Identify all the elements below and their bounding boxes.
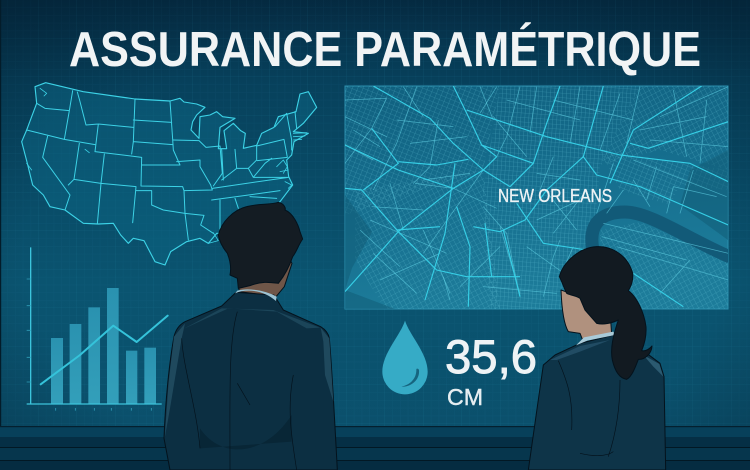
man shirt collar [235, 289, 277, 301]
bar and line chart [27, 247, 168, 411]
bars [51, 288, 156, 404]
country outline [22, 83, 317, 265]
man jacket shading [165, 308, 333, 449]
rainfall unit: CM [447, 384, 483, 410]
man hair [218, 202, 303, 288]
fine street blocks [345, 86, 728, 309]
dark corner districts [345, 150, 728, 309]
man seen from behind [164, 202, 337, 470]
drop highlight [401, 369, 419, 387]
axis ticks [27, 279, 151, 411]
map: United States [22, 83, 317, 265]
man neck and face [238, 253, 292, 297]
man suit jacket [164, 292, 337, 470]
coastal detail [27, 88, 307, 243]
map: New Orleans [345, 86, 730, 309]
map label: New Orleans: NEW ORLEANS [498, 186, 612, 206]
woman suit jacket [528, 335, 666, 470]
woman hair and ponytail [559, 247, 652, 379]
rainfall value: 35,6 [445, 330, 537, 383]
woman jacket seams [558, 361, 620, 457]
state borders [27, 91, 297, 240]
woman jacket shading [550, 340, 663, 377]
trend line [41, 316, 168, 384]
river [592, 212, 730, 257]
man jacket seams [182, 312, 297, 470]
floor ledge [0, 426, 750, 470]
axes [27, 247, 162, 404]
major streets [345, 86, 728, 307]
woman shirt collar [576, 332, 615, 345]
woman neck and face [561, 290, 612, 340]
secondary streets [345, 87, 728, 300]
woman seen from behind [528, 247, 666, 470]
icon: water drop [382, 321, 428, 394]
